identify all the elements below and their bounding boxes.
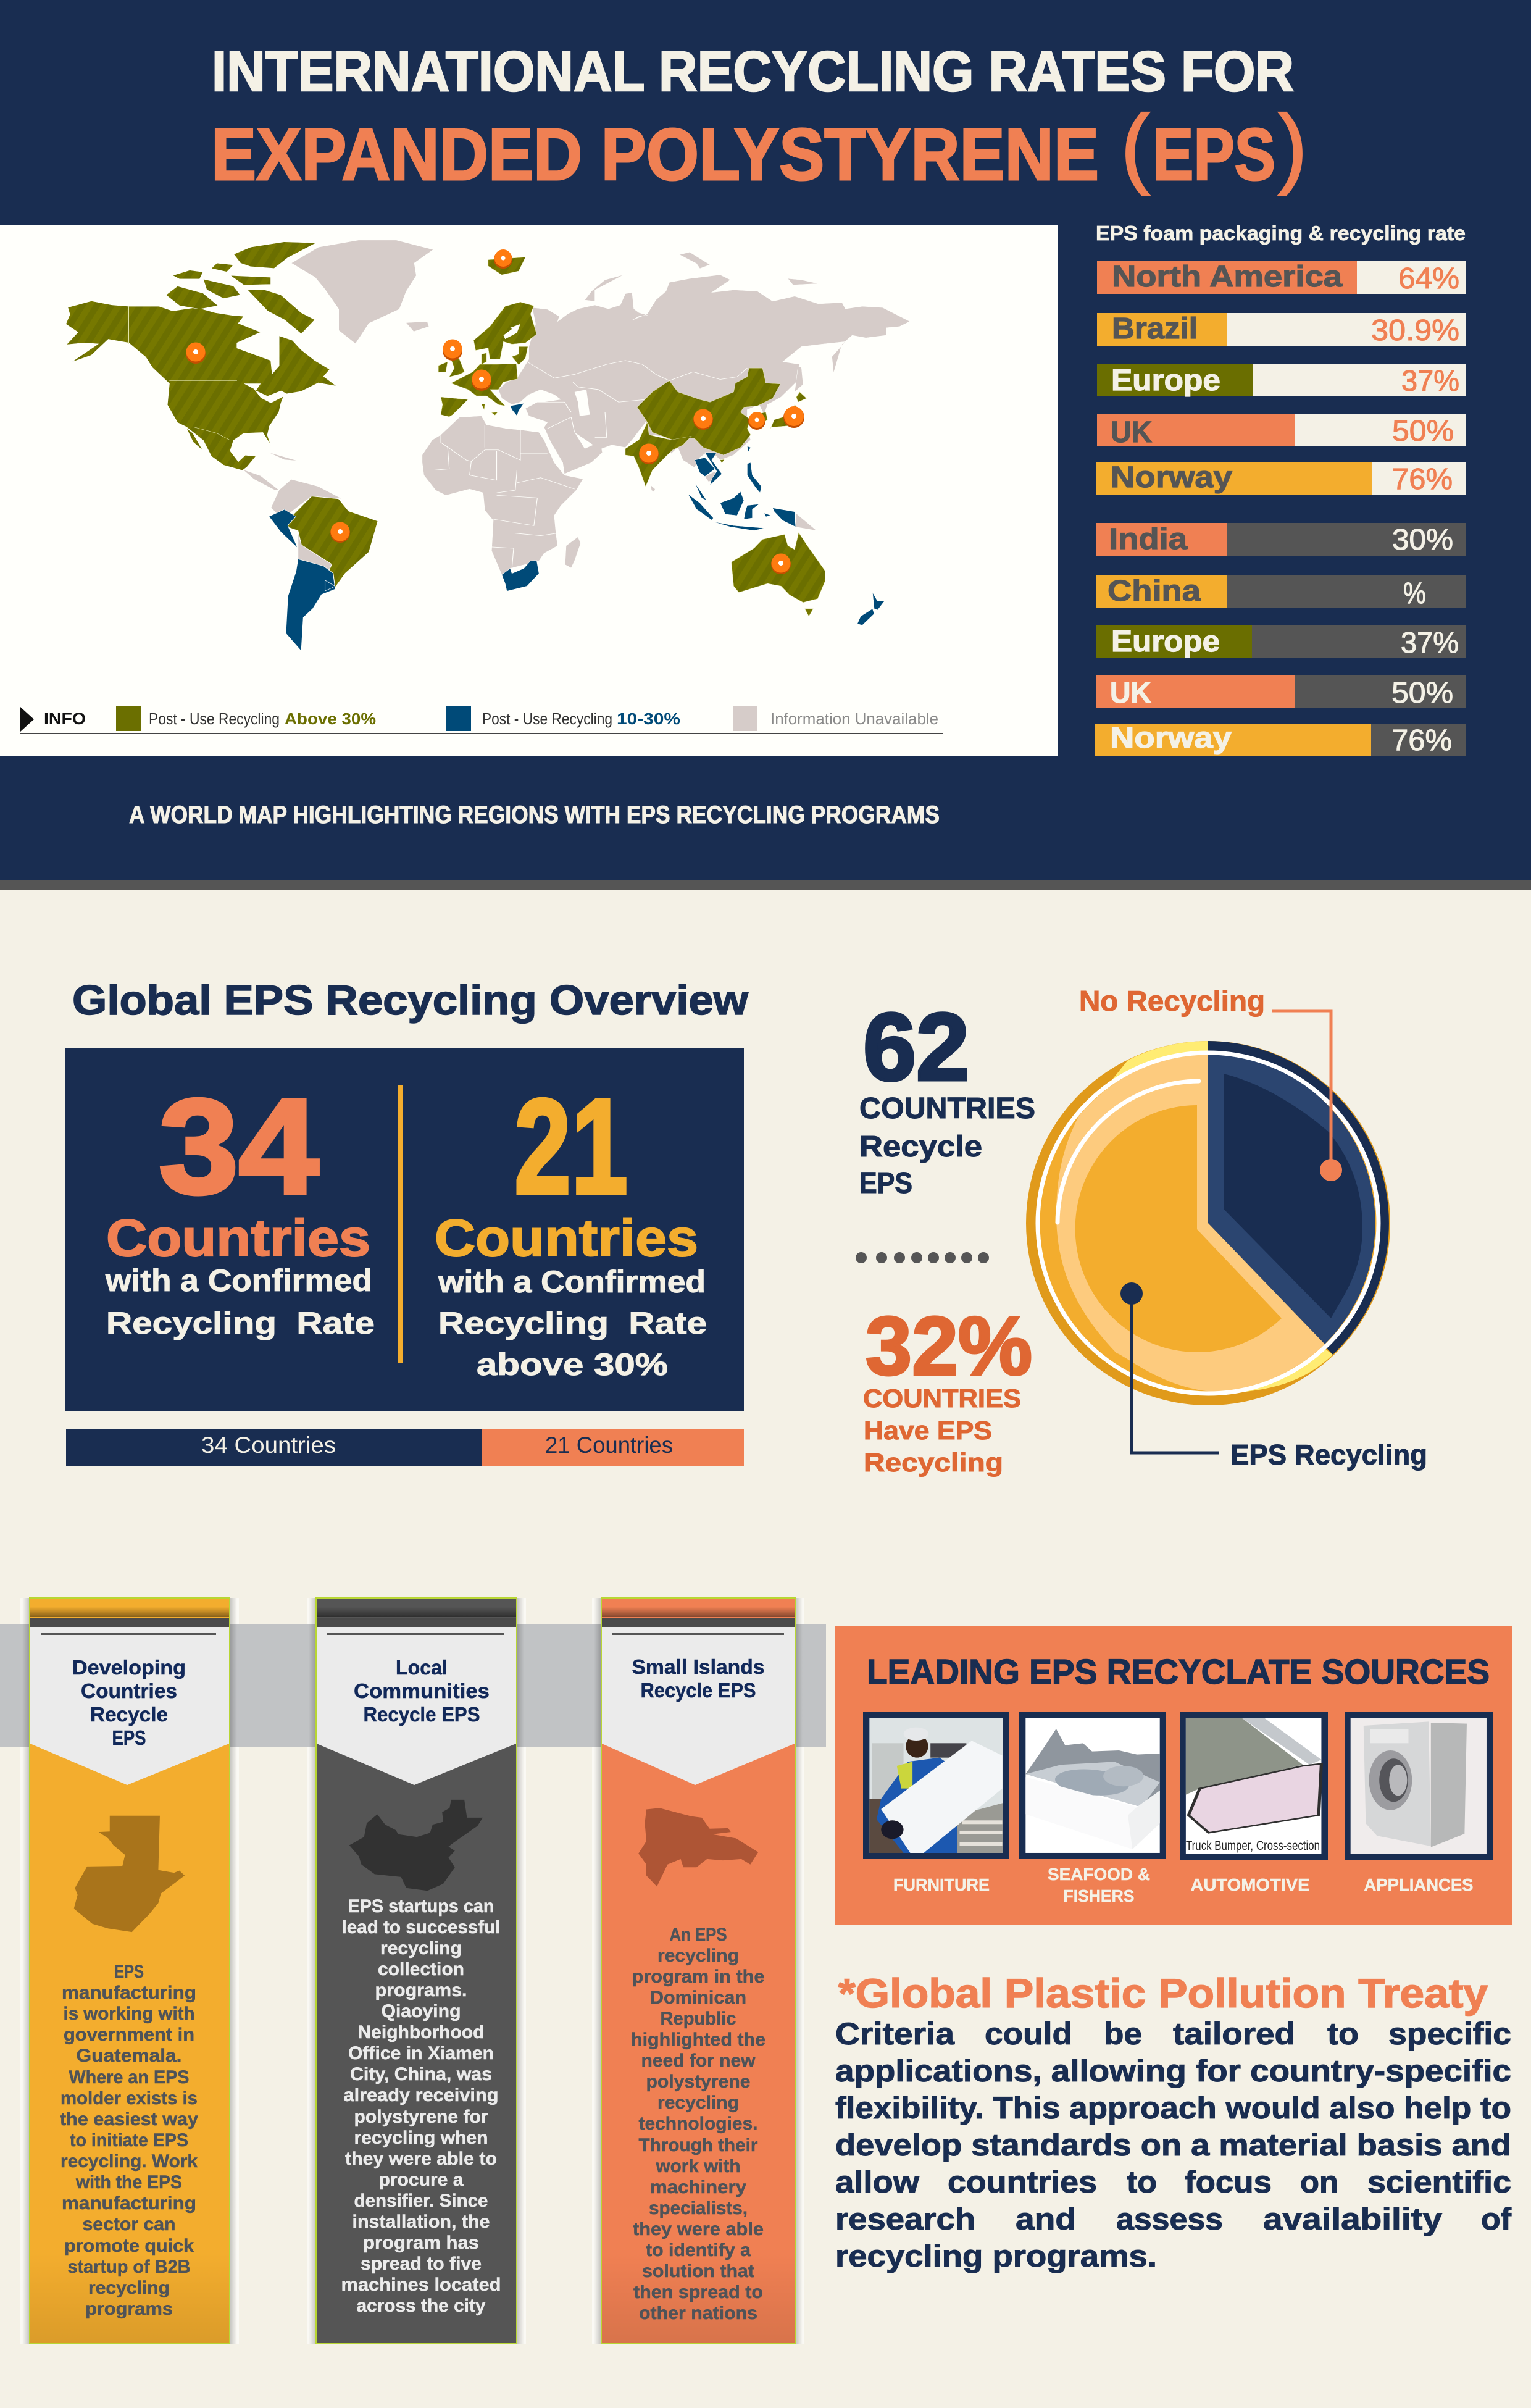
stat: 34 countries: Countries <box>106 1209 370 1267</box>
title line 2: EPS <box>1153 114 1275 196</box>
treaty paragraph: recycling programs. <box>835 2239 1157 2273</box>
map legend: Post - Use Recycling <box>149 709 280 728</box>
source labels: SEAFOOD & <box>1048 1865 1150 1884</box>
column heading: Recycle EPS <box>363 1703 480 1726</box>
column text: Where an EPS <box>69 2067 189 2088</box>
source labels: APPLIANCES <box>1364 1875 1473 1894</box>
map: Americas unavailable regions <box>243 240 433 572</box>
pie chart <box>1026 985 1427 1471</box>
stat: 62 countries recycle EPS <box>859 993 1035 1200</box>
bar: China <box>1096 575 1466 610</box>
callout: EPS Recycling: EPS Recycling <box>1230 1439 1427 1471</box>
header divider stripe <box>0 880 1531 890</box>
treaty paragraph: specific <box>1388 2017 1511 2051</box>
map: Americas and Greenland <box>65 240 433 651</box>
bar: Europe 37%: Europe <box>1111 364 1220 397</box>
column text: government in <box>64 2025 194 2045</box>
map caption: A WORLD MAP HIGHLIGHTING REGIONS WITH EPS RECYCLING PROGRAMS <box>129 801 940 829</box>
treaty paragraph: could <box>985 2017 1072 2051</box>
column text: Dominican <box>650 1988 746 2008</box>
map: Baltic cut-out <box>504 324 520 339</box>
column text: highlighted the <box>631 2030 766 2050</box>
bar: India 30% <box>1096 523 1466 556</box>
treaty paragraph: focus <box>1185 2165 1272 2199</box>
treaty paragraph <box>835 2017 1511 2273</box>
column text: Through their <box>638 2135 758 2155</box>
bar: Brazil 30.9%: Brazil <box>1112 312 1198 345</box>
stat: 62 countries recycle EPS: Recycle <box>859 1131 982 1163</box>
icon: Guatemala silhouette <box>74 1816 185 1932</box>
column heading: Recycle <box>90 1703 168 1726</box>
column text: other nations <box>639 2303 757 2323</box>
column text: machinery <box>650 2177 746 2197</box>
title line 2: EXPANDED POLYSTYRENE <box>211 114 1099 196</box>
heading: Global EPS Recycling Overview: Global EPS Recycling Overview <box>72 977 749 1024</box>
stacked bar: 34 vs 21 countries <box>66 1429 744 1466</box>
column text: recycling <box>380 1938 462 1959</box>
column text: with the EPS <box>75 2172 182 2193</box>
source labels: FURNITURE <box>893 1875 990 1894</box>
column text: then spread to <box>633 2282 763 2302</box>
panel: local communities column <box>309 1598 524 2344</box>
stat: 62 countries recycle EPS: EPS <box>859 1167 912 1200</box>
column heading: Developing <box>72 1656 186 1679</box>
column text: recycling <box>88 2278 170 2298</box>
column text: to initiate EPS <box>70 2130 188 2151</box>
bar: China: % <box>1403 577 1426 610</box>
map: Americas 10-30% regions <box>269 509 335 651</box>
treaty paragraph: research <box>835 2202 975 2236</box>
icon: Dominican Republic silhouette <box>638 1808 758 1887</box>
panel: developing countries column <box>22 1598 237 2344</box>
stat: 21 countries: 21 <box>514 1072 628 1222</box>
column text: the easiest way <box>60 2109 198 2130</box>
stat: 21 countries <box>435 1072 707 1382</box>
bar: Europe 37% (second): 37% <box>1401 627 1459 659</box>
callout: EPS Recycling <box>1120 1282 1427 1471</box>
bar: North America 64% <box>1097 261 1466 295</box>
map legend: 10-30% <box>617 709 680 728</box>
panel: small islands column <box>594 1598 803 2344</box>
bar: North America 64%: 64% <box>1398 262 1459 295</box>
treaty heading: *Global Plastic Pollution Treaty <box>838 1970 1488 2016</box>
column text: lead to successful <box>342 1917 500 1938</box>
photo frame: furniture <box>863 1712 1009 1859</box>
column text: need for new <box>641 2051 756 2071</box>
bar: Norway 76% <box>1096 461 1466 496</box>
column text <box>60 1962 198 2319</box>
stat: 21 countries: Recycling Rate <box>438 1306 707 1340</box>
column text: Guatemala. <box>77 2046 181 2066</box>
bar: North America 64%: North America <box>1112 261 1342 293</box>
column text: City, China, was <box>350 2064 492 2084</box>
column text: An EPS <box>669 1925 727 1945</box>
treaty paragraph: Criteria <box>835 2017 955 2051</box>
column heading: Recycle EPS <box>641 1679 756 1702</box>
map legend: Post - Use Recycling <box>482 709 612 728</box>
column text: program in the <box>632 1967 764 1987</box>
header panel <box>0 0 1531 880</box>
column text: installation, the <box>352 2212 490 2232</box>
map: seas and country borders <box>434 361 747 569</box>
column text: molder exists is <box>60 2088 198 2109</box>
bar: Norway 76%: Norway <box>1111 461 1232 494</box>
photo frame: automotive <box>1180 1712 1328 1860</box>
column text: Neighborhood <box>358 2022 484 2042</box>
treaty paragraph: allow <box>835 2165 919 2199</box>
treaty paragraph: of <box>1481 2202 1511 2236</box>
treaty paragraph: scientific <box>1367 2165 1511 2199</box>
column text <box>631 1925 766 2323</box>
dotted divider <box>856 1252 989 1263</box>
column text: work with <box>656 2156 741 2176</box>
treaty paragraph: applications, allowing for country-specific <box>835 2054 1511 2088</box>
bar: India 30%: 30% <box>1392 524 1453 556</box>
photo frame: appliances <box>1345 1712 1493 1860</box>
column text: recycling <box>657 1946 739 1966</box>
column text: Republic <box>661 2009 736 2029</box>
column text: densifier. Since <box>354 2191 488 2211</box>
column text: promote quick <box>64 2236 194 2256</box>
column text <box>341 1896 501 2316</box>
source labels: FISHERS <box>1063 1886 1135 1905</box>
column heading <box>632 1655 764 1702</box>
stat: 62 countries recycle EPS: COUNTRIES <box>859 1092 1035 1125</box>
column heading: Local <box>396 1656 448 1679</box>
stat: 34 countries: 34 <box>159 1072 319 1222</box>
column heading <box>72 1656 186 1749</box>
column text: Office in Xiamen <box>348 2043 494 2063</box>
treaty paragraph: assess <box>1116 2202 1223 2236</box>
stat: 32% countries have EPS recycling <box>863 1300 1032 1477</box>
bar: UK 50%: UK <box>1111 416 1152 449</box>
stat: 34 countries <box>105 1072 375 1340</box>
stat: 34 countries: Recycling Rate <box>106 1306 375 1340</box>
map: Great Lakes and borders <box>128 306 288 440</box>
column text: specialists, <box>649 2198 748 2218</box>
treaty paragraph: countries <box>948 2165 1097 2199</box>
column text: to identify a <box>646 2240 751 2260</box>
bar: China: China <box>1108 575 1201 608</box>
map legend: Above 30% <box>285 709 376 728</box>
column text: they were able <box>633 2219 764 2239</box>
stat: 32% countries have EPS recycling: COUNTRIES <box>863 1384 1021 1413</box>
title <box>211 40 1307 196</box>
sources heading: LEADING EPS RECYCLATE SOURCES <box>867 1652 1490 1692</box>
treaty paragraph: on <box>1300 2165 1338 2199</box>
treaty paragraph: availability <box>1263 2202 1442 2236</box>
bar: Norway 76% (second): Norway <box>1110 722 1232 755</box>
column text: manufacturing <box>62 2193 196 2214</box>
column heading: Small Islands <box>632 1655 764 1678</box>
map: Eastern above 30% regions <box>438 257 825 616</box>
callout: No Recycling <box>1079 985 1342 1181</box>
column outer glow <box>20 1598 804 2344</box>
map: Europe, Africa, Asia, Oceania <box>406 252 910 625</box>
treaty paragraph: and <box>1016 2202 1076 2236</box>
column text: already receiving <box>343 2085 499 2105</box>
treaty paragraph: flexibility. This approach would also help to <box>835 2091 1511 2125</box>
column text: collection <box>378 1959 464 1979</box>
stat: 34 countries: with a Confirmed <box>105 1263 372 1298</box>
map: location pins <box>186 249 804 574</box>
stat: 21 countries: Countries <box>435 1209 698 1267</box>
column text: recycling. Work <box>60 2151 198 2172</box>
bar: Brazil 30.9%: 30.9% <box>1371 314 1459 347</box>
column heading: EPS <box>112 1726 146 1749</box>
column heading: Communities <box>354 1679 490 1702</box>
bar: UK 50% (second): UK <box>1110 677 1151 709</box>
title line 1: INTERNATIONAL RECYCLING RATES FOR <box>212 40 1294 103</box>
bar: Europe 37%: 37% <box>1401 365 1459 398</box>
bar: Norway 76%: 76% <box>1392 463 1453 496</box>
column text: programs. <box>375 1980 467 2000</box>
column text: program has <box>363 2233 479 2253</box>
title line 2: ) <box>1279 98 1307 196</box>
grey banner behind columns <box>0 1624 826 1747</box>
column text: technologies. <box>638 2113 758 2134</box>
treaty paragraph: develop standards on a material basis and <box>835 2128 1511 2162</box>
column text: solution that <box>642 2261 754 2281</box>
column text: is working with <box>63 2004 195 2024</box>
column heading: Countries <box>81 1679 177 1702</box>
column text: they were able to <box>345 2149 497 2169</box>
stacked bar: 34 vs 21 countries: 34 Countries <box>201 1432 336 1458</box>
stat: 32% countries have EPS recycling: Recycling <box>864 1448 1003 1477</box>
column text: recycling when <box>354 2128 488 2148</box>
stacked bar: 34 vs 21 countries: 21 Countries <box>545 1432 673 1458</box>
map: Eastern unavailable regions <box>406 252 910 575</box>
column heading <box>354 1656 490 1726</box>
stat: 21 countries: with a Confirmed <box>438 1265 706 1299</box>
bar: Europe 37% <box>1097 364 1466 398</box>
bar: India 30%: India <box>1109 523 1187 556</box>
column text: EPS startups can <box>348 1896 494 1917</box>
photo frame: seafood <box>1019 1712 1166 1859</box>
treaty paragraph: to <box>1127 2165 1157 2199</box>
panel: world map <box>0 225 1058 756</box>
column text: sector can <box>83 2214 175 2235</box>
column text: manufacturing <box>62 1983 196 2003</box>
bar: Norway 76% (second): 76% <box>1391 724 1452 757</box>
map legend: Information Unavailable <box>770 709 938 728</box>
bar: UK 50% (second): 50% <box>1391 677 1453 709</box>
map: Americas above 30% regions <box>65 242 378 587</box>
source labels <box>893 1865 1473 1905</box>
panel: leading EPS recyclate sources <box>835 1626 1512 1925</box>
bar: UK 50% (second) <box>1096 675 1466 709</box>
map: Eastern 10-30% regions <box>502 403 885 625</box>
title line 2: ( <box>1121 98 1149 196</box>
column text: spread to five <box>361 2254 482 2274</box>
column text: across the city <box>357 2296 486 2316</box>
stat: 21 countries: above 30% <box>477 1347 668 1382</box>
icon: China silhouette <box>349 1800 483 1891</box>
callout: No Recycling: No Recycling <box>1079 985 1265 1017</box>
treaty paragraph: tailored <box>1173 2017 1295 2051</box>
stat: 32% countries have EPS recycling: Have EPS <box>864 1416 992 1445</box>
treaty paragraph: be <box>1104 2017 1142 2051</box>
treaty paragraph: to <box>1327 2017 1359 2051</box>
column text: polystyrene <box>646 2071 751 2092</box>
stat: 62 countries recycle EPS: 62 <box>863 993 969 1100</box>
panel: recycling rate bars <box>1095 222 1466 757</box>
bar: UK 50% <box>1097 414 1466 449</box>
bar: Brazil 30.9% <box>1097 312 1466 347</box>
column text: EPS <box>114 1962 144 1982</box>
column text: machines located <box>341 2275 501 2295</box>
column text: programs <box>85 2299 173 2319</box>
column text: recycling <box>657 2092 739 2113</box>
column text: procure a <box>379 2170 464 2190</box>
source labels: AUTOMOTIVE <box>1190 1875 1310 1894</box>
bar: Europe 37% (second) <box>1096 625 1466 659</box>
panel: country counts <box>65 1048 744 1411</box>
map legend: INFO <box>44 709 86 728</box>
column text: startup of B2B <box>68 2257 190 2277</box>
bar: Europe 37% (second): Europe <box>1111 625 1220 658</box>
column text: Qiaoying <box>382 2001 461 2021</box>
bars heading: EPS foam packaging & recycling rate <box>1096 222 1466 245</box>
photo frame: automotive: Truck Bumper, Cross-section <box>1186 1839 1320 1853</box>
map legend <box>20 706 943 734</box>
bar: UK 50%: 50% <box>1392 415 1454 448</box>
stat: 32% countries have EPS recycling: 32% <box>866 1300 1032 1392</box>
column text: polystyrene for <box>354 2107 488 2127</box>
bar: Norway 76% (second) <box>1095 722 1466 757</box>
